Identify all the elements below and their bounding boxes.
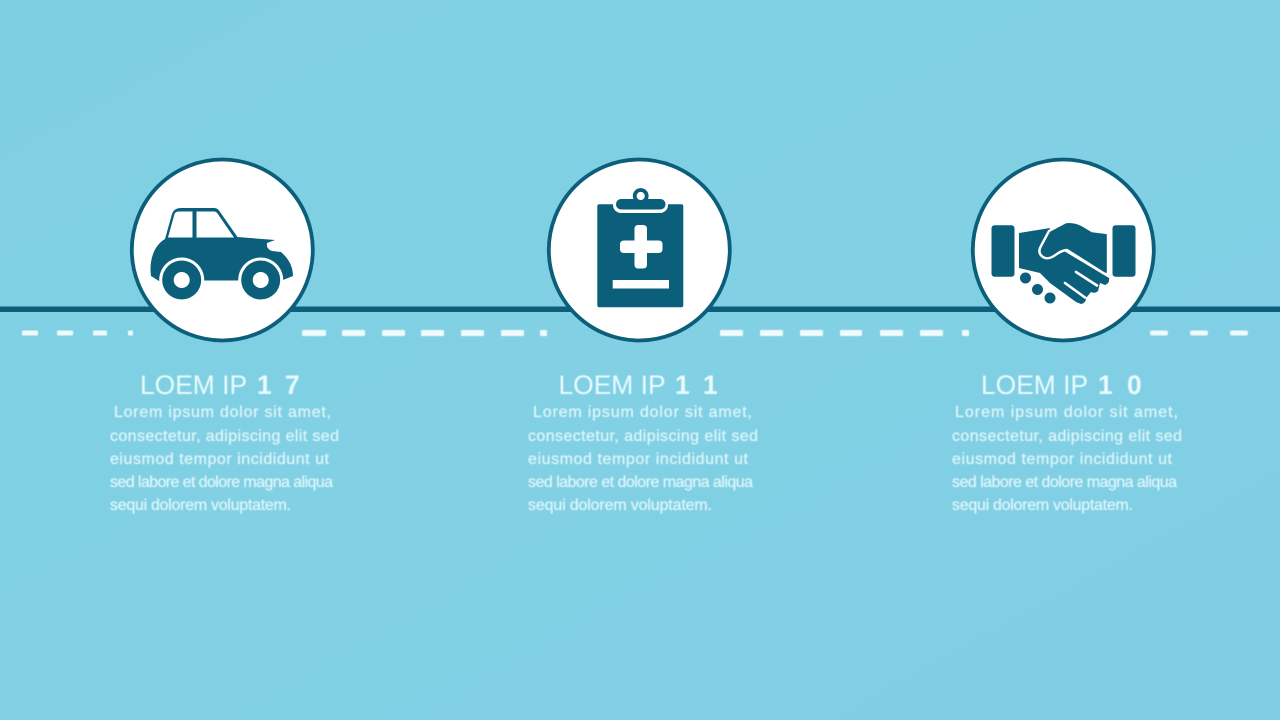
step 2: clipboard xyxy=(528,160,758,514)
heading 3: 1 xyxy=(1098,370,1113,400)
body text 2: consectetur, adipiscing elit sed xyxy=(528,428,758,445)
heading 2: LOEM IP xyxy=(558,370,666,400)
body text 3: sed labore et dolore magna aliqua xyxy=(952,474,1177,491)
body text 3: Lorem ipsum dolor sit amet, xyxy=(955,404,1178,421)
body text 1 xyxy=(110,404,339,514)
heading 1: 1 xyxy=(257,370,272,400)
heading 3: LOEM IP xyxy=(981,370,1088,400)
circle badge 3 xyxy=(973,160,1154,340)
icon: handshake xyxy=(992,222,1136,304)
heading 1: 7 xyxy=(285,370,300,400)
body text 3: sequi dolorem voluptatem. xyxy=(952,497,1133,514)
body text 2: sequi dolorem voluptatem. xyxy=(528,497,712,514)
heading 2: 1 xyxy=(675,370,690,400)
body text 1: sed labore et dolore magna aliqua xyxy=(110,474,333,491)
body text 1: eiusmod tempor incididunt ut xyxy=(110,451,330,468)
heading 3: 0 xyxy=(1127,370,1142,400)
icon: medical clipboard xyxy=(597,190,683,307)
step 1: car xyxy=(110,160,339,514)
body text 3: eiusmod tempor incididunt ut xyxy=(952,451,1173,468)
body text 2 xyxy=(528,404,758,514)
dashed road line xyxy=(22,330,1248,336)
icon: car xyxy=(151,208,293,302)
body text 2: sed labore et dolore magna aliqua xyxy=(528,474,753,491)
body text 1: consectetur, adipiscing elit sed xyxy=(110,428,339,445)
heading 2: 1 xyxy=(703,370,718,400)
body text 3: consectetur, adipiscing elit sed xyxy=(952,428,1182,445)
circle badge 2 xyxy=(549,160,730,340)
timeline line xyxy=(0,306,1280,312)
body text 1: sequi dolorem voluptatem. xyxy=(110,497,291,514)
body text 3 xyxy=(952,404,1182,514)
step 3: handshake xyxy=(952,160,1182,514)
body text 2: Lorem ipsum dolor sit amet, xyxy=(533,404,752,421)
heading 1: LOEM IP xyxy=(140,370,247,400)
circle badge 1 xyxy=(132,160,313,340)
body text 2: eiusmod tempor incididunt ut xyxy=(528,451,749,468)
body text 1: Lorem ipsum dolor sit amet, xyxy=(114,404,331,421)
